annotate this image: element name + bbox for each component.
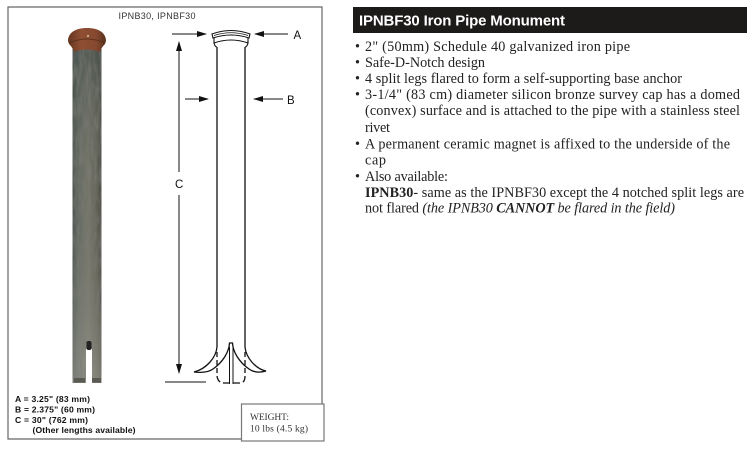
feature list: •	[355, 39, 360, 55]
dimension C: C	[175, 179, 183, 191]
title bar: IPNBF30 Iron Pipe Monument	[359, 12, 565, 30]
feature list	[355, 39, 744, 216]
feature list: Also available:	[365, 169, 448, 185]
dimension B: B	[287, 95, 295, 107]
feature list: •	[355, 71, 360, 87]
feature list: •	[355, 87, 360, 103]
feature list: 3-1/4" (83 cm) diameter silicon bronze survey cap has a domed	[365, 87, 740, 103]
feature list: rivet	[365, 120, 390, 136]
model label: IPNB30, IPNBF30	[118, 11, 196, 21]
feature list: •	[355, 169, 360, 185]
feature list: Safe-D-Notch design	[365, 55, 485, 71]
feature list: •	[355, 55, 360, 71]
title bar	[353, 7, 747, 33]
dimension B	[185, 95, 295, 107]
weight box	[242, 404, 324, 441]
feature list: A permanent ceramic magnet is affixed to the underside of the	[365, 136, 730, 152]
dimensions legend	[15, 394, 136, 435]
feature list: cap	[365, 152, 386, 168]
dimension A: A	[294, 30, 302, 42]
feature list: 4 split legs flared to form a self-supporting base anchor	[365, 71, 682, 87]
feature list: •	[355, 136, 360, 152]
feature list: IPNB30- same as the IPNBF30 except the 4 notched split legs are	[365, 185, 744, 201]
feature list: (convex) surface and is attached to the pipe with a stainless steel	[365, 103, 740, 119]
frame border	[8, 7, 322, 439]
dimensions legend: (Other lengths available)	[32, 425, 136, 435]
dimension A	[172, 30, 302, 42]
line drawing: pipe monument	[194, 30, 266, 384]
dimensions legend: A = 3.25" (83 mm)	[15, 394, 90, 404]
weight box: 10 lbs (4.5 kg)	[250, 424, 308, 434]
feature list: not flared (the IPNB30 CANNOT be flared in the field)	[365, 200, 675, 216]
weight box: WEIGHT:	[250, 413, 289, 423]
feature list: 2" (50mm) Schedule 40 galvanized iron pipe	[365, 39, 630, 55]
dimensions legend: C = 30" (762 mm)	[15, 415, 88, 425]
photo: iron pipe with bronze cap	[68, 28, 106, 384]
dimensions legend: B = 2.375" (60 mm)	[15, 404, 95, 414]
